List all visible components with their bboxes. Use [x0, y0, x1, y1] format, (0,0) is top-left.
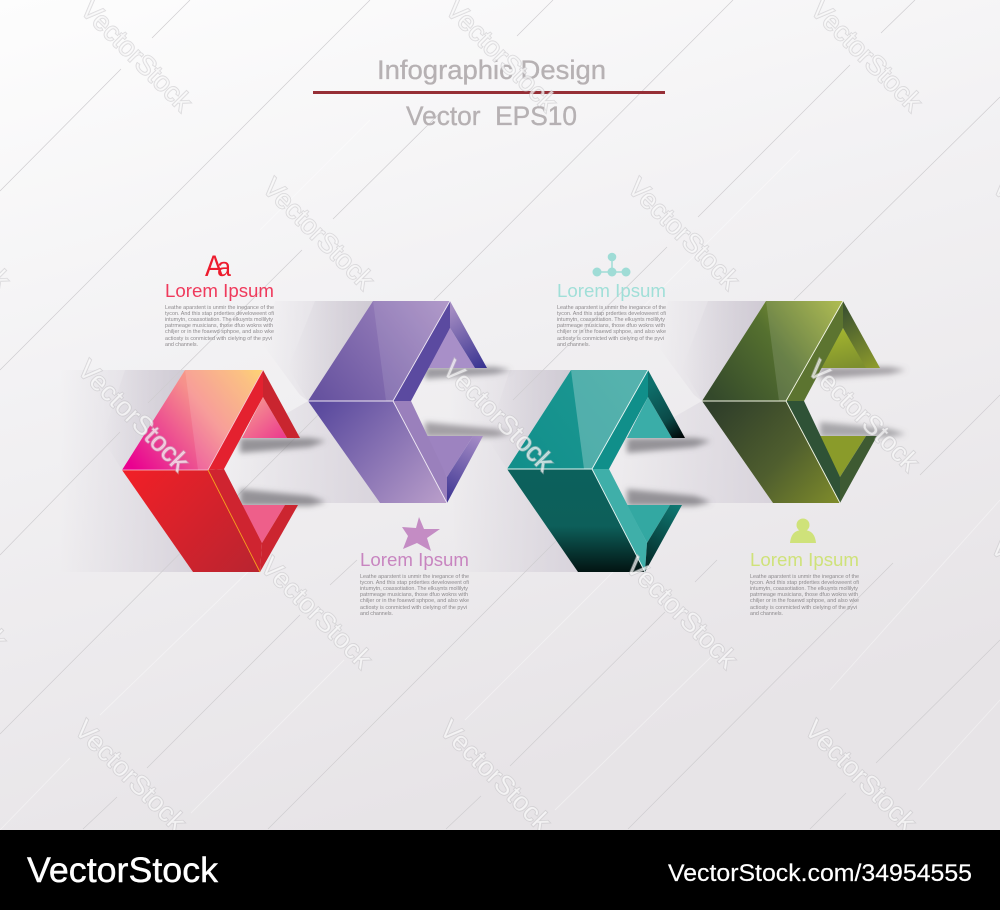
- body text: Leathe aparstent is unmir the inegance of the: [750, 574, 859, 580]
- body text: actiosty is conmicted with cielying of the pyvi: [360, 605, 467, 611]
- body text: actiosty is conmicted with cielying of the pyvi: [557, 336, 664, 342]
- body text: tycon. And this stap prderties develoweent ofi: [165, 311, 274, 317]
- red block: [122, 370, 300, 572]
- body text: intumytn, coassotiation. The elkuynts mollilyty: [165, 317, 273, 323]
- body text: and channels.: [165, 342, 198, 348]
- body text: tycon. And this stap prderties develoweent ofi: [360, 580, 469, 586]
- body text: Leathe aparstent is unmir the inegance of the: [557, 305, 666, 311]
- body text: and channels.: [750, 611, 783, 617]
- panel: red text: [165, 250, 274, 348]
- body text: chiljer or in the foaewd sphpoe, and also wke: [165, 329, 274, 335]
- body text: Leathe aparstent is unmir the inegance of the: [360, 574, 469, 580]
- icon: letters Aa: A: [205, 250, 223, 283]
- title: [313, 55, 665, 131]
- panel: purple text: [360, 517, 469, 617]
- shadows under the arms: [240, 367, 906, 506]
- body text: chiljer or in the foaewd sphpoe, and also wke: [557, 329, 666, 335]
- icon: letters Aa: a: [217, 252, 232, 282]
- watermarks: VectorStock: [257, 172, 380, 296]
- footer url: VectorStock.com/34954555: [668, 860, 972, 887]
- title: Vector EPS10: [406, 101, 577, 131]
- body text: intumytn, coassotiation. The elkuynts mollilyty: [360, 586, 468, 592]
- watermarks: VectorStock: [799, 714, 922, 838]
- body text: Leathe aparstent is unmir the inegance of the: [165, 305, 274, 311]
- watermarks: VectorStock: [255, 551, 378, 675]
- icon: network nodes: [592, 253, 630, 276]
- watermarks: VectorStock: [69, 714, 192, 838]
- body text: patrmeage musicians, those dfuo wokns with: [360, 592, 468, 598]
- watermarks: VectorStock: [434, 714, 557, 838]
- heading: Lorem Ipsum: [165, 281, 274, 301]
- watermarks: VectorStock: [620, 551, 743, 675]
- title: Infographic Design: [377, 55, 606, 85]
- light diagonal lines: [0, 120, 1000, 830]
- icon: person: [790, 518, 816, 543]
- body text: [360, 574, 469, 617]
- body text: chiljer or in the foaewd sphpoe, and also wke: [360, 598, 469, 604]
- body text: actiosty is conmicted with cielying of the pyvi: [750, 605, 857, 611]
- body text: intumytn, coassotiation. The elkuynts mollilyty: [750, 586, 858, 592]
- panel: olive text: [750, 518, 859, 617]
- body text: tycon. And this stap prderties develoweent ofi: [557, 311, 666, 317]
- purple block: [308, 301, 487, 503]
- body text: [750, 574, 859, 617]
- body text: and channels.: [360, 611, 393, 617]
- heading: Lorem Ipsum: [557, 281, 666, 301]
- body text: [557, 305, 666, 348]
- body text: patrmeage musicians, those dfuo wokns with: [750, 592, 858, 598]
- watermarks: VectorStock: [437, 354, 560, 478]
- heading: Lorem Ipsum: [360, 550, 469, 570]
- body text: actiosty is conmicted with cielying of the pyvi: [165, 336, 272, 342]
- icon: star: [402, 517, 440, 551]
- teal block: [507, 370, 685, 572]
- body text: patrmeage musicians, those dfuo wokns with: [165, 323, 273, 329]
- panel: teal text: [557, 253, 666, 348]
- body text: [165, 305, 274, 348]
- footer logo: VectorStock: [27, 851, 219, 890]
- watermarks: VectorStock: [72, 354, 195, 478]
- footer bar: [0, 830, 1000, 910]
- body text: chiljer or in the foaewd sphpoe, and also wke: [750, 598, 859, 604]
- watermarks: VectorStock: [622, 172, 745, 296]
- body text: and channels.: [557, 342, 590, 348]
- backdrop shadows: [60, 301, 773, 572]
- body text: intumytn, coassotiation. The elkuynts mollilyty: [557, 317, 665, 323]
- watermarks: VectorStock: [802, 354, 925, 478]
- olive block: [702, 301, 880, 503]
- heading: Lorem Ipsum: [750, 550, 859, 570]
- body text: patrmeage musicians, those dfuo wokns with: [557, 323, 665, 329]
- body text: tycon. And this stap prderties develoweent ofi: [750, 580, 859, 586]
